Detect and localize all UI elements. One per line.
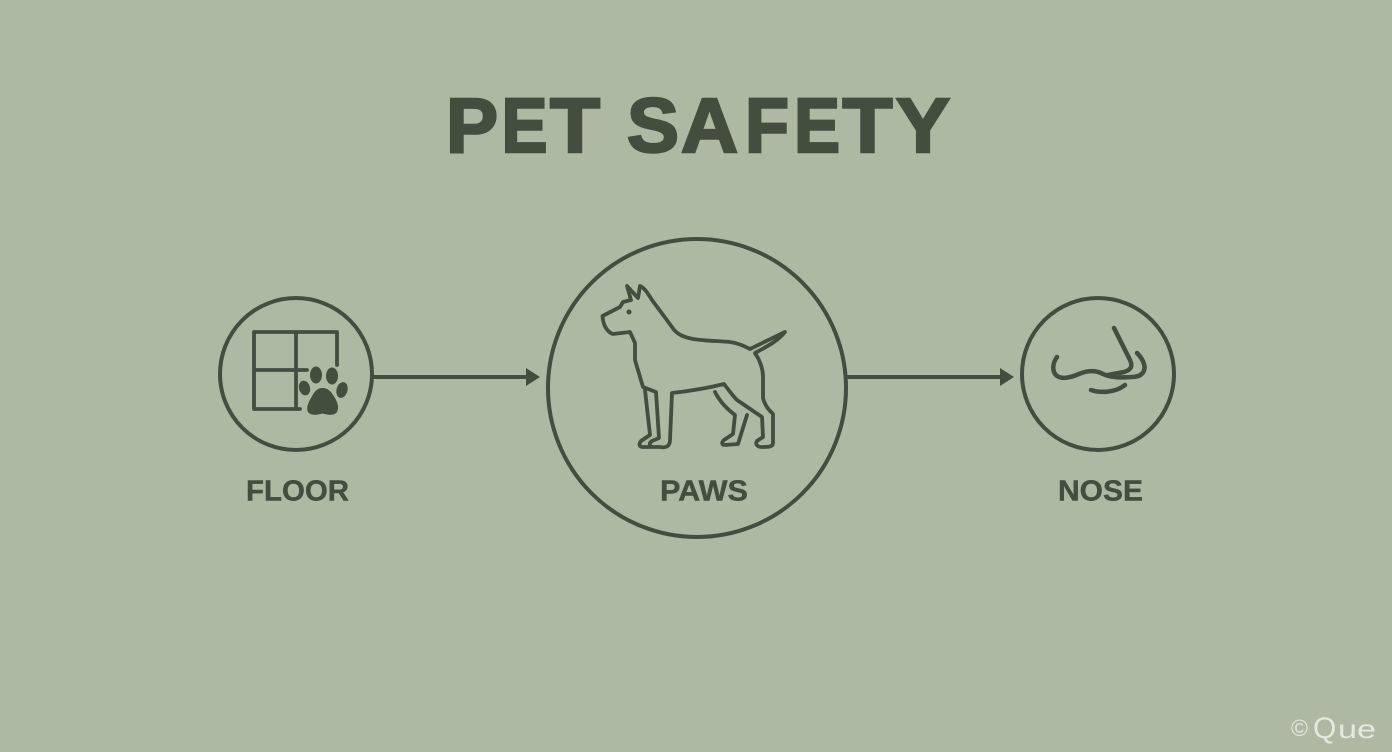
- floor circle: [220, 298, 372, 450]
- icon: window grid: [254, 332, 337, 409]
- label: floor: FLOOR: [246, 476, 349, 508]
- node: nose: [1022, 298, 1174, 508]
- watermark: [1291, 712, 1376, 745]
- dog eye: [626, 310, 632, 314]
- label: nose: NOSE: [1058, 476, 1143, 508]
- icon: paw print: [297, 366, 349, 415]
- title: T: [842, 83, 892, 169]
- title: S: [627, 83, 679, 169]
- arrow: paws to nose: [847, 368, 1014, 386]
- node: floor: [220, 298, 372, 508]
- title: A: [681, 83, 738, 169]
- nose circle: [1022, 298, 1174, 450]
- title: F: [745, 83, 789, 169]
- watermark: Q: [1313, 712, 1336, 745]
- title: [446, 83, 950, 169]
- title: P: [446, 83, 498, 169]
- title: Y: [896, 83, 950, 169]
- paws circle: [548, 239, 846, 537]
- icon: dog: [602, 286, 785, 447]
- title: E: [794, 83, 840, 169]
- title: T: [550, 83, 600, 169]
- watermark: ©: [1291, 715, 1308, 741]
- arrow: floor to paws: [373, 368, 540, 386]
- node: paws: [548, 239, 846, 537]
- watermark: ue: [1338, 714, 1376, 744]
- icon: nose: [1053, 328, 1144, 392]
- title: E: [502, 83, 548, 169]
- label: paws: PAWS: [660, 476, 748, 508]
